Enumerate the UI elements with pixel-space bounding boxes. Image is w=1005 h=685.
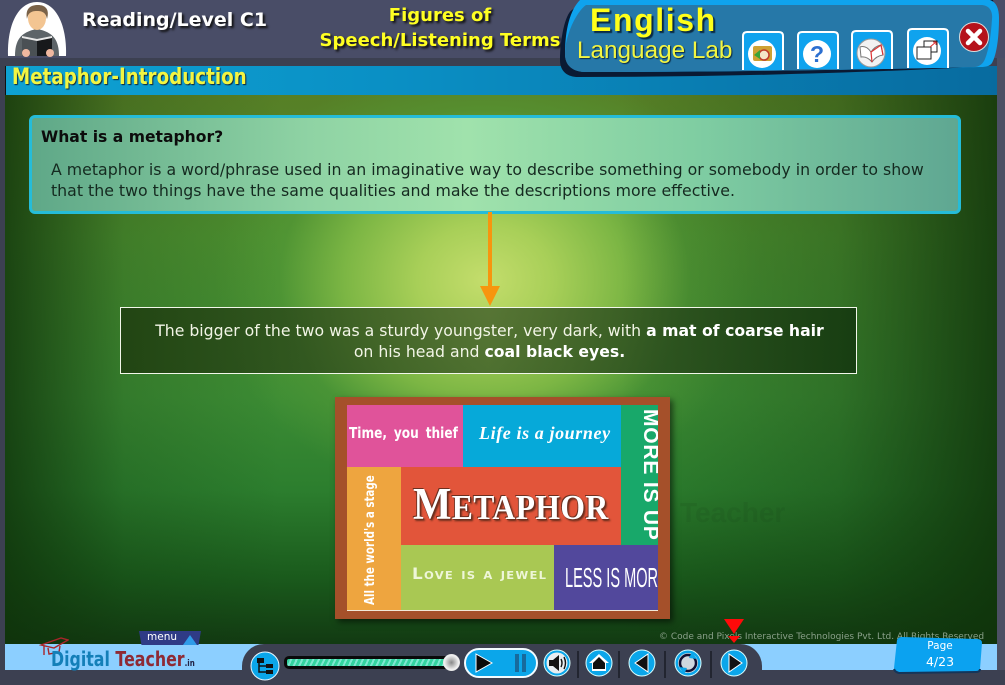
- copyright: © Code and Pixels Interactive Technologies Pvt. Ltd. All Rights Reserved: [659, 632, 984, 642]
- definition heading: What is a metaphor?: [41, 128, 223, 146]
- topic heading: [320, 5, 562, 53]
- page badge: [893, 637, 982, 674]
- avatar: reader icon: [8, 2, 66, 57]
- toolbar separators: [577, 651, 712, 678]
- arrow: definition to example: [480, 212, 500, 306]
- section title: Metaphor-Introduction: [12, 65, 247, 90]
- purple tile: [554, 545, 658, 610]
- icon: menu arrow: [183, 635, 197, 645]
- icon: previous: [628, 650, 656, 676]
- tab: windows: [907, 28, 949, 68]
- icon: sound: [544, 650, 570, 676]
- pink tile text: Time, you thief: [349, 424, 458, 442]
- progress bar: [284, 656, 454, 669]
- topic heading: Figures of: [389, 5, 491, 26]
- logo text: Digital Teacher.in: [51, 647, 195, 671]
- menu label: menu: [147, 631, 177, 643]
- watermark: Teacher: [680, 497, 785, 528]
- lime tile: [401, 545, 554, 610]
- blue tile: [463, 405, 621, 467]
- section title bar: [5, 66, 997, 95]
- page number: 4/23: [926, 654, 954, 669]
- right edge: [997, 58, 1005, 670]
- header bar: [0, 0, 1005, 58]
- example text: The bigger of the two was a sturdy youngster, very dark, with a mat of coarse hair: [155, 321, 824, 340]
- definition text: that the two things have the same qualities and make the descriptions more effective.: [51, 181, 735, 200]
- icon: refresh: [674, 650, 702, 676]
- definition text: [51, 160, 924, 200]
- menu tab: [139, 631, 201, 645]
- icon: home: [586, 650, 612, 676]
- definition panel: [29, 115, 961, 214]
- page label: Page: [927, 640, 953, 652]
- level heading: Reading/Level C1: [82, 9, 267, 31]
- footer strip: [5, 644, 997, 670]
- English Language Lab panel: [560, 0, 999, 77]
- red tile: [401, 467, 621, 545]
- green tile: [621, 405, 658, 545]
- example box: [120, 307, 857, 374]
- play pause pill: [464, 648, 538, 678]
- tab: help: [797, 31, 839, 69]
- product title: English: [590, 2, 717, 38]
- orange tile: [347, 467, 401, 610]
- pink tile: [347, 405, 463, 467]
- picture bottom highlight: [347, 610, 658, 611]
- tab: help: ?: [810, 41, 824, 67]
- blue tile text: Life is a journey: [479, 423, 611, 443]
- content area: green background: [5, 95, 997, 644]
- definition text: A metaphor is a word/phrase used in an imaginative way to describe something or somebody in order to show: [51, 160, 924, 179]
- edge vignette: [5, 95, 997, 644]
- orange tile text: All the world's a stage: [363, 475, 378, 605]
- topic heading: Speech/Listening Terms: [320, 30, 560, 51]
- indicator: red arrows: [724, 619, 744, 643]
- product subtitle: Language Lab: [577, 37, 732, 64]
- tab: folder clock: [742, 31, 784, 70]
- tab: book: [851, 30, 893, 69]
- Digital Teacher logo: [39, 637, 195, 671]
- progress knob: [443, 654, 460, 671]
- icon: tree menu: [250, 652, 280, 680]
- red tile title: METAPHOR: [413, 479, 609, 529]
- close button: [959, 22, 989, 52]
- framed metaphor picture: [335, 397, 670, 619]
- example text: on his head and coal black eyes.: [354, 342, 625, 361]
- icon: graduation cap: [39, 637, 69, 655]
- lime tile text: Love is a jewel: [412, 564, 547, 583]
- icon: next: [720, 650, 748, 676]
- example text: [155, 321, 824, 361]
- player control bar: [242, 644, 762, 685]
